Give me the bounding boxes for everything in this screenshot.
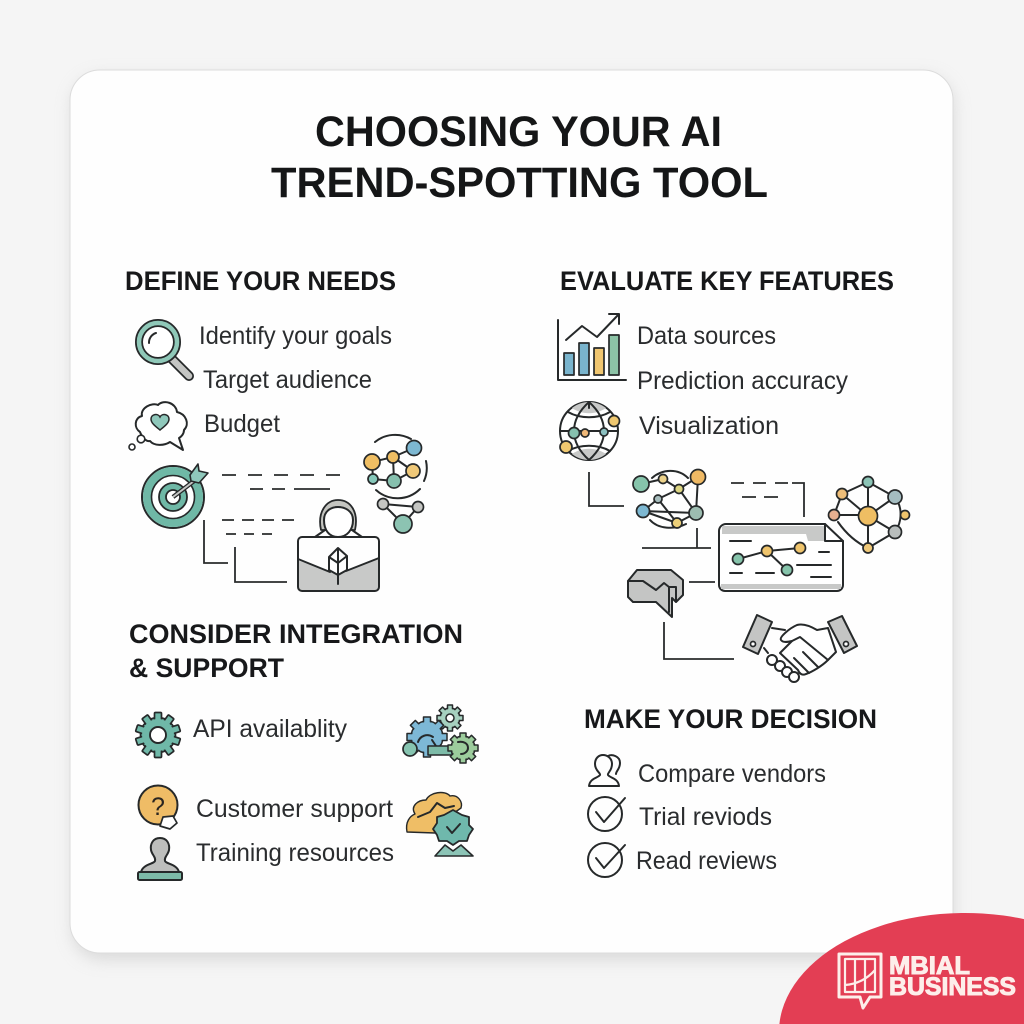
title bbox=[271, 108, 768, 207]
text: target audience: Target audience bbox=[203, 366, 372, 394]
icon: bar chart with arrow bbox=[558, 314, 626, 380]
text: customer support: Customer support bbox=[196, 795, 393, 823]
icon: question bubble: ? bbox=[151, 793, 165, 821]
heading: consider integration and support: CONSIDER INTEGRATION bbox=[129, 619, 463, 649]
icon: document with line chart bbox=[719, 524, 843, 591]
text: read reviews: Read reviews bbox=[636, 847, 777, 875]
icon: small network bbox=[378, 498, 424, 533]
text: api availablity: API availablity bbox=[193, 715, 347, 743]
icon: network cluster bbox=[364, 435, 427, 498]
logo badge bbox=[779, 913, 1024, 1024]
panel: make your decision bbox=[584, 704, 877, 877]
logo text: MBIAL bbox=[889, 952, 970, 980]
icon: speech bubble bbox=[628, 570, 683, 617]
panel: white card bbox=[70, 70, 953, 953]
text: trial reviods: Trial reviods bbox=[639, 803, 772, 831]
heading: make your decision: MAKE YOUR DECISION bbox=[584, 704, 877, 734]
badge background bbox=[779, 913, 1024, 1024]
title: TREND-SPOTTING TOOL bbox=[271, 159, 768, 207]
heading: consider integration and support bbox=[129, 619, 463, 683]
icon: thought bubble with heart bbox=[129, 402, 187, 450]
panel: define your needs bbox=[125, 266, 427, 591]
heading: define your needs: DEFINE YOUR NEEDS bbox=[125, 266, 396, 296]
text: budget: Budget bbox=[204, 410, 280, 438]
icon: gear bbox=[136, 712, 180, 758]
connector dashes: left panel bbox=[204, 475, 342, 582]
icon: handshake bbox=[743, 615, 857, 682]
text: training resources: Training resources bbox=[196, 839, 394, 867]
logo icon bbox=[839, 954, 881, 1008]
text: visualization: Visualization bbox=[639, 412, 779, 440]
panel: consider integration and support bbox=[129, 619, 478, 880]
icon: magnifying glass bbox=[139, 323, 189, 376]
heading: evaluate key features: EVALUATE KEY FEATURES bbox=[560, 266, 894, 296]
icon: user on base bbox=[138, 838, 182, 880]
icon: globe with nodes bbox=[560, 402, 620, 460]
logo text: BUSINESS bbox=[889, 973, 1016, 1001]
icon: gear cluster bbox=[403, 705, 478, 763]
icon: cloud with badge bbox=[407, 793, 473, 856]
icon: check circle one bbox=[588, 797, 625, 831]
icon: target with arrow bbox=[142, 464, 208, 528]
connector lines: right panel bbox=[589, 472, 804, 659]
text: identify your goals: Identify your goals bbox=[199, 322, 392, 350]
title: CHOOSING YOUR AI bbox=[315, 108, 722, 156]
panel: evaluate key features bbox=[558, 266, 910, 682]
icon: question bubble bbox=[138, 786, 178, 829]
icon: two people bbox=[589, 755, 620, 786]
logo text bbox=[889, 952, 1016, 1001]
icon: hub network right bbox=[828, 476, 910, 553]
icon: check circle two bbox=[588, 843, 625, 877]
icon: network graph center bbox=[633, 470, 706, 528]
heading: consider integration and support: & SUPPORT bbox=[129, 653, 284, 683]
text: compare vendors: Compare vendors bbox=[638, 760, 826, 788]
text: data sources: Data sources bbox=[637, 322, 776, 350]
text: prediction accuracy: Prediction accuracy bbox=[637, 367, 848, 395]
icon: person with briefcase bbox=[297, 500, 379, 591]
